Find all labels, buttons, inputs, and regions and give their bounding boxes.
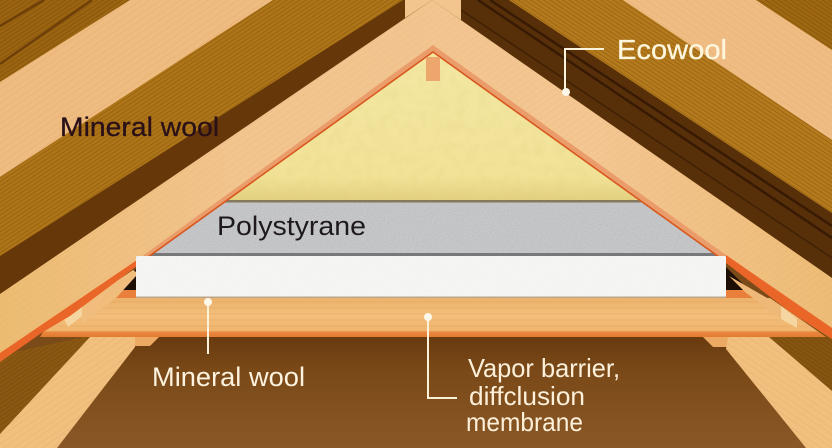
- callout: Mineral wool upper label: Mineral wool: [60, 112, 219, 142]
- apex king post: [405, 0, 461, 81]
- callout: vapor barrier label and leader: diffclusion: [469, 381, 585, 411]
- angled brace and end tab right: [729, 276, 797, 328]
- callout: Polystyrane label: Polystyrane: [217, 211, 366, 241]
- layer: grey polystyrene board: [140, 200, 730, 256]
- dark gaps at the eaves: [106, 266, 756, 298]
- background: roof timber left: [0, 0, 432, 436]
- background: roof timber right: [432, 0, 832, 395]
- callout: Ecowool label and leader: Ecowool: [617, 34, 727, 65]
- angled brace and end tab left: [63, 270, 136, 327]
- callout: Ecowool label and leader: [562, 34, 727, 96]
- callout: Mineral wool lower label and leader: [152, 298, 305, 392]
- under-beam tabs and struts: [0, 337, 832, 448]
- layer: white mineral wool board: [136, 256, 726, 298]
- room wall below the ceiling beam: [57, 337, 806, 448]
- panel: upper insulation layers: [151, 53, 716, 256]
- layer: ecowool yellow fill: [228, 53, 638, 200]
- callout: Mineral wool lower label and leader: Mineral wool: [152, 362, 305, 392]
- callout: vapor barrier label and leader: membrane: [466, 407, 583, 437]
- ceiling beam: [40, 298, 826, 337]
- callout: vapor barrier label and leader: [424, 313, 620, 437]
- callout: vapor barrier label and leader: Vapor barrier,: [468, 353, 620, 383]
